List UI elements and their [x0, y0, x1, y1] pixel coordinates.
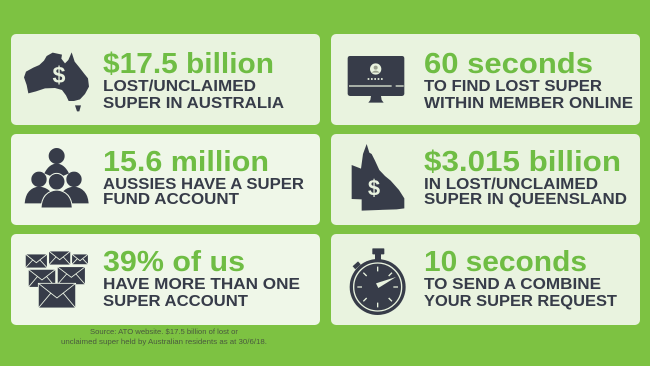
text: super in Australia: SUPER IN AUSTRALIA — [103, 95, 284, 112]
source note — [61, 327, 267, 346]
text: in lost/unclaimed: IN LOST/UNCLAIMED — [424, 176, 598, 193]
text: within member online: WITHIN MEMBER ONLINE — [424, 95, 633, 112]
source note: unclaimed super held by Australian residents as at 30/6/18. — [61, 337, 267, 346]
text: to send a combine: TO SEND A COMBINE — [424, 276, 601, 293]
text: your super request: YOUR SUPER REQUEST — [424, 293, 618, 310]
panel: 15.6 million — [11, 134, 320, 225]
icon: group of people — [25, 148, 89, 208]
text: fund account: FUND ACCOUNT — [103, 191, 240, 208]
text: lost/unclaimed: LOST/UNCLAIMED — [103, 78, 256, 95]
icon: stack of envelopes — [25, 251, 88, 308]
icon: Australia map with dollar sign — [24, 52, 89, 111]
heading: 39% of us: 39% of us — [103, 246, 245, 278]
icon: Queensland map with dollar sign — [352, 144, 404, 211]
text: have more than one: HAVE MORE THAN ONE — [103, 276, 300, 293]
icon: Queensland map with dollar sign: $ — [368, 176, 380, 201]
panel: lost super in Australia — [11, 34, 320, 125]
text: super account: SUPER ACCOUNT — [103, 293, 249, 310]
text: super in Queensland: SUPER IN QUEENSLAND — [424, 191, 627, 208]
heading: 60 seconds: 60 seconds — [424, 48, 593, 80]
icon: stopwatch — [350, 248, 406, 315]
icon: computer monitor with login — [348, 56, 404, 103]
icon: Australia map with dollar sign: $ — [53, 62, 66, 88]
panel: 60 seconds — [331, 34, 640, 125]
panel: 39% of us — [11, 234, 320, 325]
text: Aussies have a super: AUSSIES HAVE A SUPER — [103, 176, 304, 193]
panel: 10 seconds — [331, 234, 640, 325]
heading: 15.6 million: 15.6 million — [103, 146, 269, 178]
text: to find lost super: TO FIND LOST SUPER — [424, 78, 602, 95]
source note: Source: ATO website. $17.5 billion of lost or — [90, 327, 239, 336]
panel: $3.015 billion — [331, 134, 640, 225]
heading: $3.015 billion: $3.015 billion — [424, 146, 621, 178]
heading: $17.5 billion: $17.5 billion — [103, 48, 274, 80]
heading: 10 seconds: 10 seconds — [424, 246, 587, 278]
